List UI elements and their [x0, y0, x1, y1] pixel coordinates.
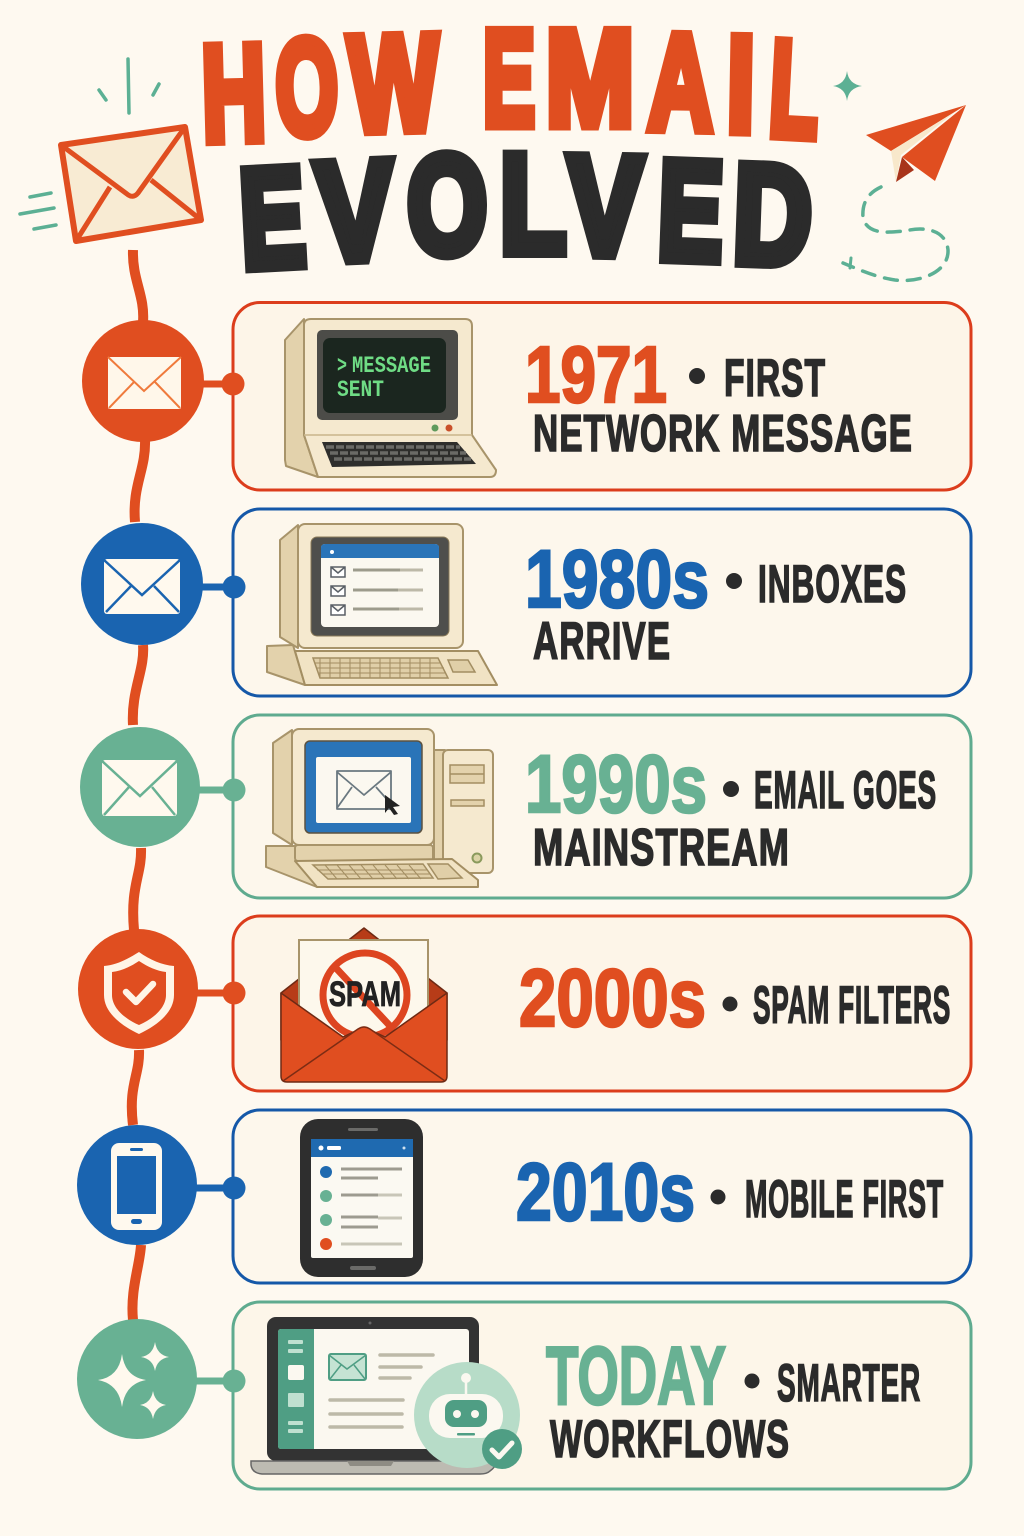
- screen text: MESSAGE: [352, 353, 431, 379]
- panel: 1980s: [233, 509, 971, 696]
- label: 2000s Spam Filters: [519, 953, 951, 1044]
- label: 2000s Spam Filters: 2000s: [519, 953, 706, 1044]
- panel: 2010s: [233, 1110, 971, 1283]
- check badge: [482, 1429, 522, 1469]
- illustration: inbox computer: [267, 524, 497, 685]
- title line: EVOLVED: [236, 126, 814, 298]
- label: 1980s Inboxes Arrive: [525, 534, 907, 671]
- icon: envelope: [104, 559, 180, 614]
- title line: HOW EMAIL: O: [274, 10, 340, 164]
- icon: envelope: [102, 760, 177, 816]
- label: 2010s Mobile First: 2010s: [516, 1147, 695, 1238]
- screen text: [337, 353, 431, 403]
- label: 2010s Mobile First: [516, 1147, 944, 1238]
- title line: HOW EMAIL: [200, 2, 823, 170]
- illustration: desktop computer with tower: [266, 729, 493, 887]
- screen text: >: [337, 353, 347, 379]
- label: 1980s Inboxes Arrive: ARRIVE: [533, 612, 671, 671]
- spam stamp text: SPAM: [329, 975, 401, 1014]
- icon: sparkles: [98, 1342, 169, 1419]
- label: 1990s Email Goes Mainstream: 1990s: [525, 739, 707, 830]
- timeline spine: [132, 250, 145, 1320]
- title line: HOW EMAIL: H: [200, 17, 268, 170]
- title line: EVOLVED: V: [566, 126, 644, 284]
- node 6: sparkles icon and connector: [77, 1319, 246, 1439]
- title line: EVOLVED: O: [406, 126, 488, 283]
- node 1: email icon and connector: [82, 320, 244, 442]
- node 4: shield icon and connector: [78, 929, 246, 1049]
- icon: teal sparkle: [833, 71, 862, 101]
- label: 1990s Email Goes Mainstream: MAINSTREAM: [533, 819, 790, 877]
- icon: envelope: [108, 357, 181, 409]
- AI robot badge: [414, 1362, 522, 1469]
- label: 1980s Inboxes Arrive: INBOXES: [758, 555, 907, 614]
- title: [200, 2, 823, 298]
- icon: flying envelope: [20, 59, 201, 241]
- title line: EVOLVED: E: [656, 132, 726, 290]
- illustration: tablet with mail list: [300, 1119, 423, 1277]
- panel: 2000s: [233, 916, 971, 1091]
- node 3: email icon and connector: [80, 727, 246, 847]
- label: 1971 First Network Message: [525, 330, 913, 463]
- panel: 1971: [233, 302, 971, 490]
- label: 1990s Email Goes Mainstream: [525, 739, 937, 877]
- label: 1980s Inboxes Arrive: 1980s: [525, 534, 709, 625]
- node 5: phone icon and connector: [77, 1125, 246, 1245]
- title line: EVOLVED: D: [731, 136, 814, 295]
- icon: paper plane with dashed trail: [843, 105, 966, 280]
- icon: smartphone: [111, 1143, 162, 1230]
- panel: 1990s: [233, 715, 971, 898]
- title line: HOW EMAIL: L: [766, 12, 823, 166]
- title line: HOW EMAIL: E: [483, 2, 535, 154]
- illustration: retro terminal: [285, 319, 496, 477]
- label: 1971 First Network Message: FIRST: [724, 349, 826, 408]
- title line: EVOLVED: E: [236, 139, 309, 298]
- illustration: laptop with AI robot: [251, 1317, 522, 1474]
- title line: HOW EMAIL: I: [726, 9, 756, 161]
- label: Today Smarter Workflows: TODAY: [546, 1329, 726, 1422]
- title line: HOW EMAIL: A: [647, 7, 715, 159]
- label: Today Smarter Workflows: [546, 1329, 921, 1469]
- title line: EVOLVED: L: [500, 127, 566, 282]
- label: Today Smarter Workflows: WORKFLOWS: [550, 1410, 790, 1469]
- panel: Today: [233, 1302, 971, 1489]
- title line: HOW EMAIL: M: [546, 2, 634, 154]
- title line: HOW EMAIL: W: [347, 6, 441, 160]
- node 2: email icon and connector: [81, 523, 246, 645]
- screen text: SENT: [337, 377, 384, 403]
- title line: EVOLVED: V: [313, 132, 397, 291]
- icon: shield check: [104, 952, 174, 1034]
- illustration: spam envelope: [281, 928, 447, 1082]
- label: 1971 First Network Message: 1971: [525, 330, 667, 419]
